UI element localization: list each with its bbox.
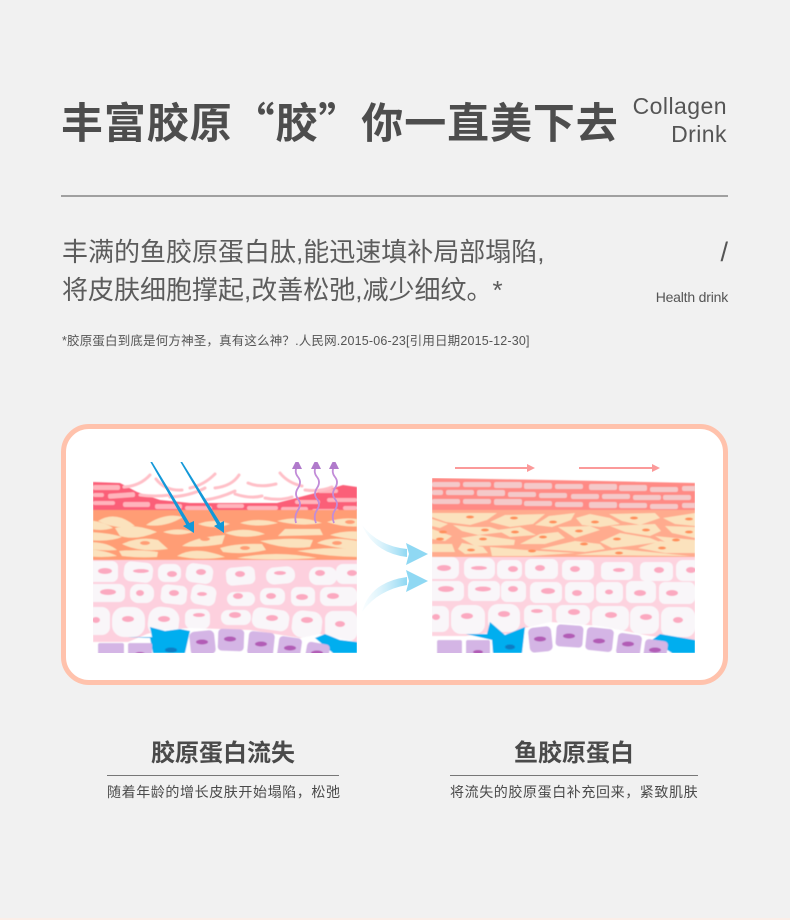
description text bbox=[62, 237, 544, 305]
description text: 丰满的鱼胶原蛋白肽,能迅速填补局部塌陷, bbox=[62, 237, 544, 267]
english title: Collagen Drink bbox=[633, 93, 727, 147]
plump dermis layer bbox=[432, 510, 695, 559]
epidermis cells bbox=[85, 560, 364, 642]
smooth outer skin layer bbox=[432, 478, 696, 514]
english label: Health drink: Health drink bbox=[656, 289, 728, 305]
title: 丰富胶原“胶”你一直美下去 bbox=[61, 90, 619, 151]
panel: skin comparison bbox=[61, 424, 728, 685]
caption description: 随着年龄的增长皮肤开始塌陷，松弛 bbox=[107, 784, 341, 800]
divider under title bbox=[61, 195, 728, 197]
caption: collagen loss bbox=[107, 740, 341, 800]
caption rule bbox=[450, 775, 698, 776]
diagram: damaged skin with collagen loss bbox=[93, 462, 357, 653]
blue arrows pointing into skin bbox=[150, 460, 224, 533]
pink arrows above restored skin bbox=[455, 464, 660, 472]
basal layer with blue and purple cells bbox=[432, 622, 695, 653]
diagram: restored skin with fish collagen bbox=[432, 478, 695, 653]
plump epidermis cells bbox=[424, 557, 701, 640]
basal layer with blue and purple cells bbox=[98, 626, 357, 653]
caption: fish collagen bbox=[450, 740, 698, 800]
middle arrows: from damaged to restored bbox=[362, 525, 428, 612]
purple rising wavy arrows bbox=[292, 459, 339, 523]
english title: Collagen Drink: Drink bbox=[671, 121, 727, 147]
caption description: 将流失的胶原蛋白补充回来，紧致肌肤 bbox=[450, 784, 698, 800]
damaged outer skin layer bbox=[93, 473, 357, 514]
footnote citation: *胶原蛋白到底是何方神圣，真有这么神？.人民网.2015-06-23[引用日期2015-12-30] bbox=[62, 334, 530, 348]
english title: Collagen Drink: Collagen bbox=[633, 93, 727, 119]
slash mark: / bbox=[720, 237, 728, 267]
caption heading: 胶原蛋白流失 bbox=[151, 740, 295, 767]
caption rule bbox=[107, 775, 339, 776]
caption heading: 鱼胶原蛋白 bbox=[514, 740, 634, 767]
collapsed dermis layer bbox=[88, 510, 362, 562]
skin diagrams and arrows bbox=[93, 462, 695, 653]
description text: 将皮肤细胞撑起,改善松弛,减少细纹。* bbox=[62, 275, 503, 305]
